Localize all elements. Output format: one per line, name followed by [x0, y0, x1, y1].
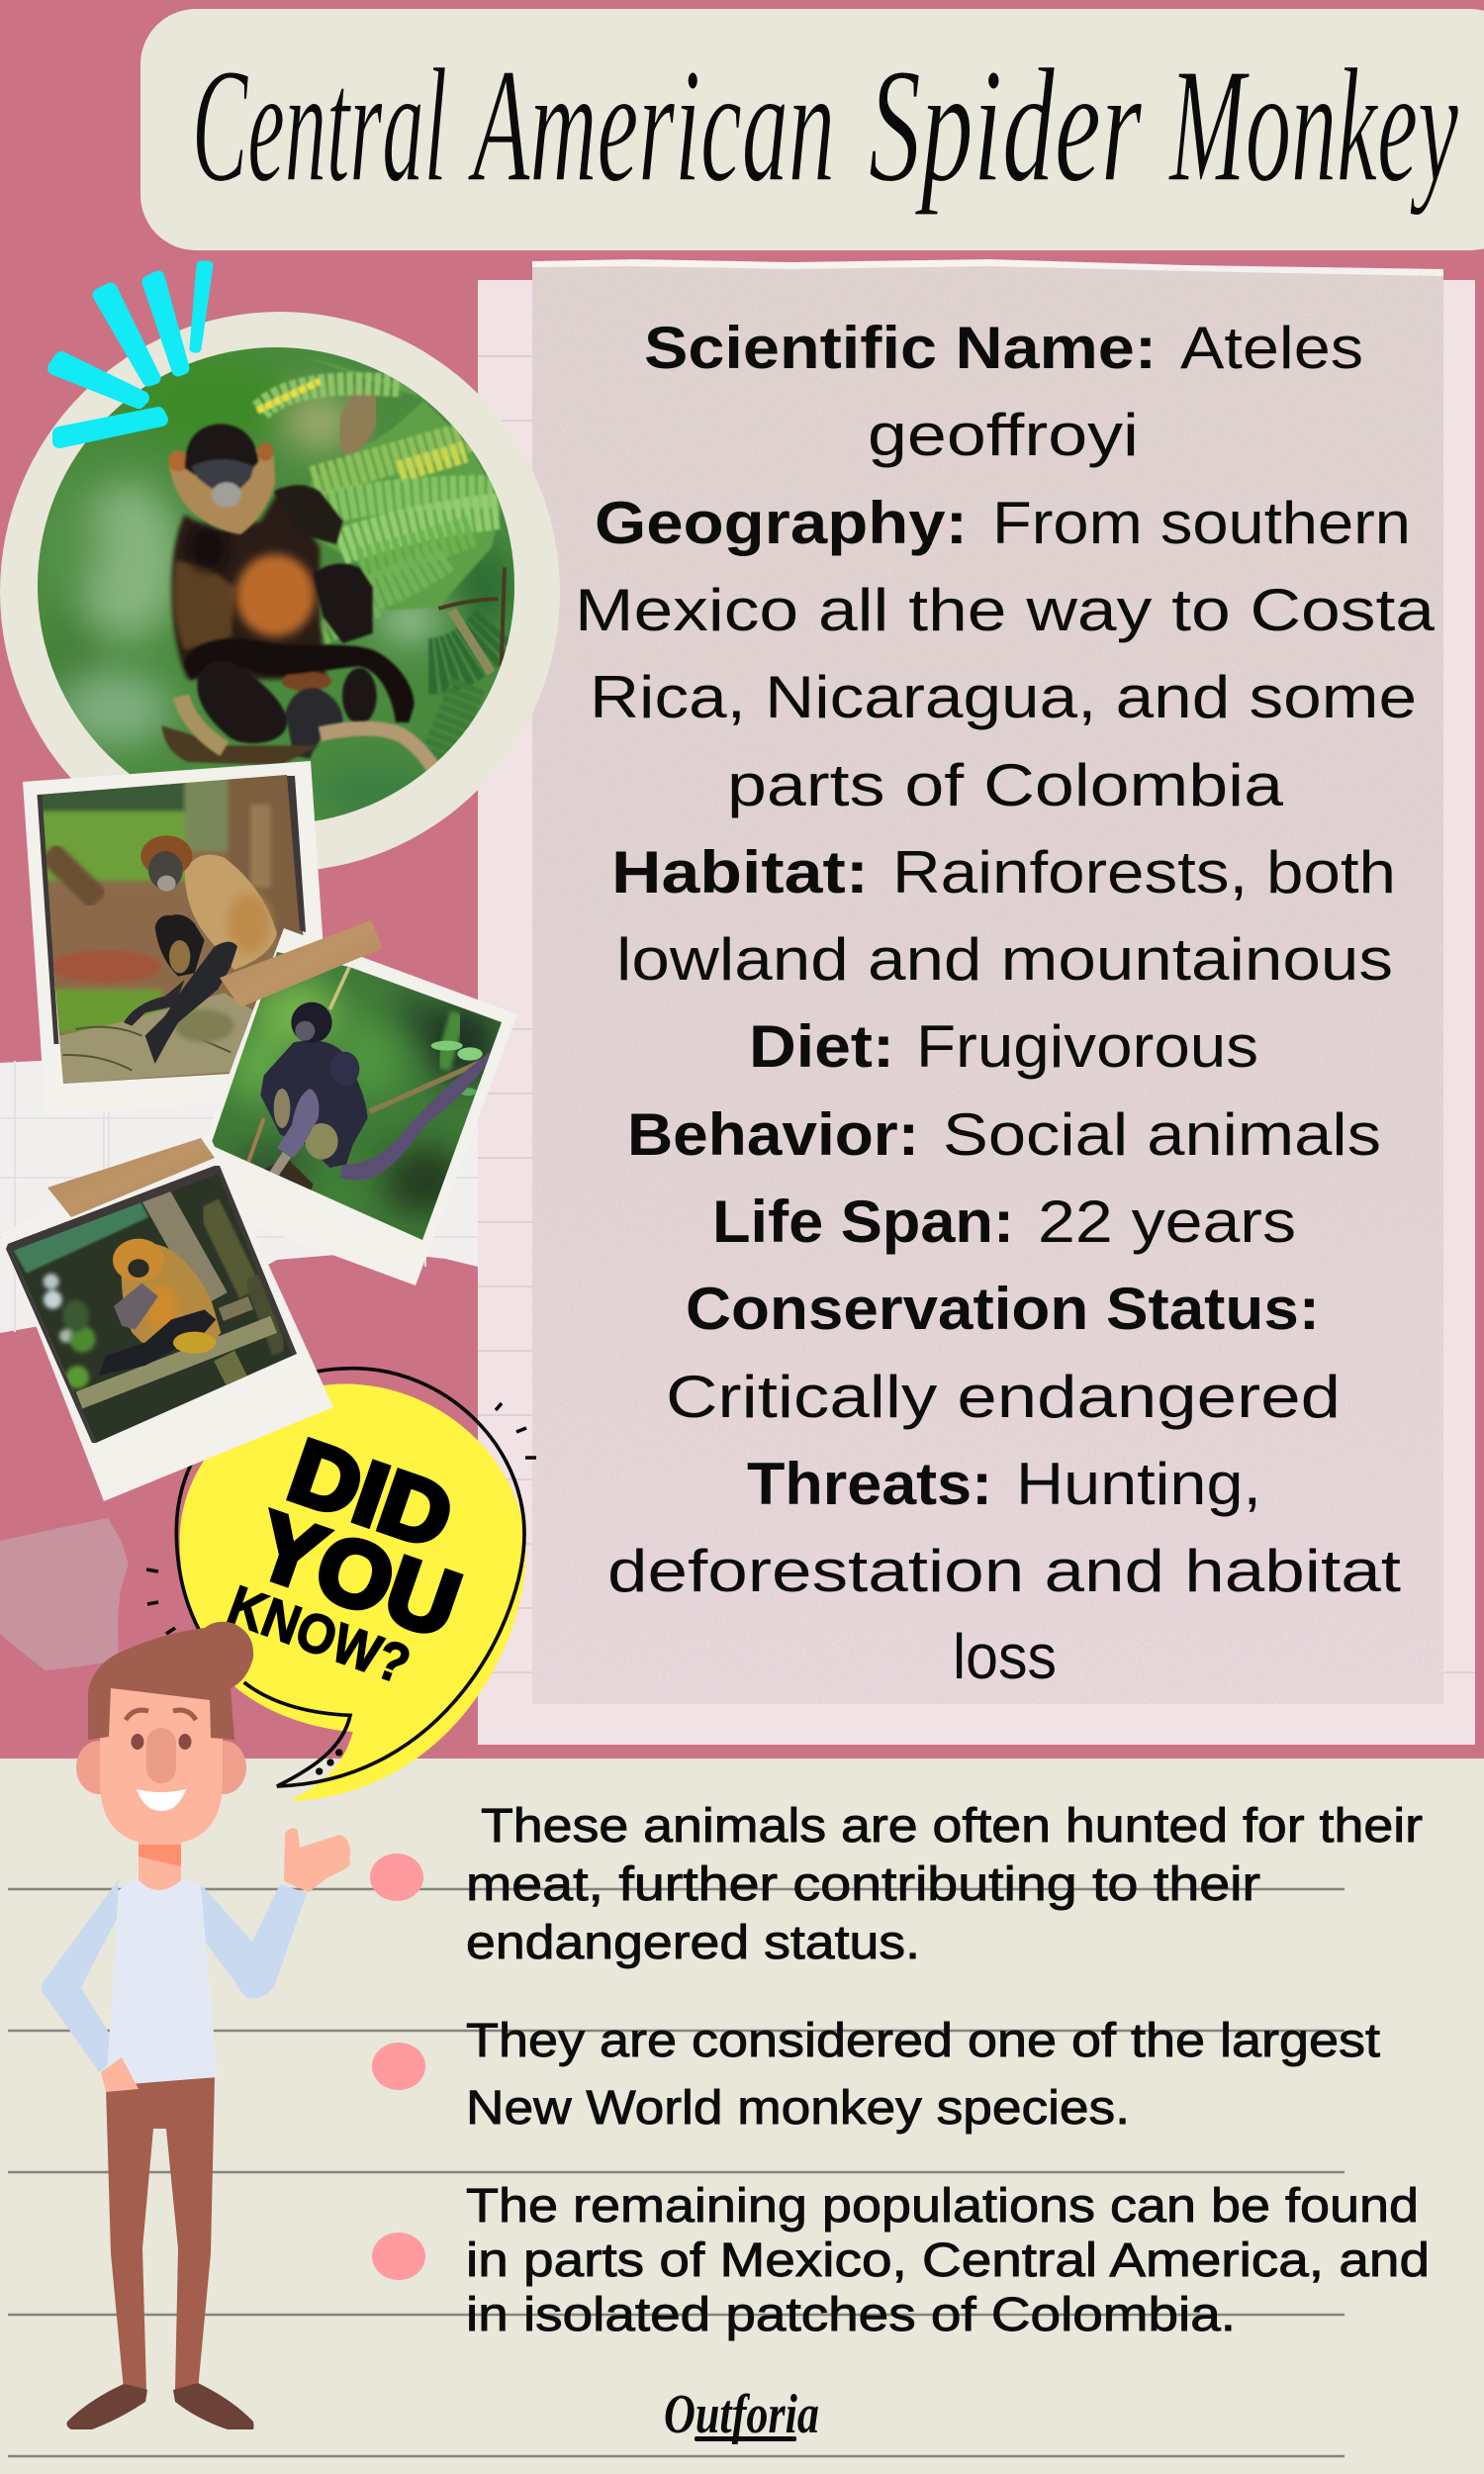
- text block: species facts: [575, 315, 1436, 1692]
- text block: species facts: 22 years: [1038, 1189, 1296, 1255]
- bubble text: KNOW?: [221, 1573, 418, 1696]
- polaroid 1: [20, 761, 336, 1118]
- text block: species facts: deforestation and habitat: [607, 1538, 1401, 1604]
- cyan accent burst: [54, 265, 209, 441]
- title: Spider: [869, 35, 1142, 216]
- title: Central: [192, 35, 447, 216]
- text block: species facts: Mexico all the way to Costa: [575, 577, 1436, 643]
- text block: species facts: Hunting,: [1016, 1451, 1261, 1517]
- text block: species facts: Frugivorous: [916, 1013, 1258, 1080]
- text block: fact 3: in isolated patches of Colombia.: [466, 2289, 1236, 2341]
- title: American: [467, 35, 835, 216]
- tape 2: [47, 1138, 215, 1217]
- torso: [107, 1876, 218, 2083]
- text block: species facts: From southern: [992, 490, 1411, 556]
- text block: species facts: Life Span:: [712, 1189, 1014, 1255]
- monkey: [168, 424, 414, 759]
- bubble text: DID: [277, 1421, 464, 1569]
- text block: species facts: lowland and mountainous: [616, 926, 1393, 993]
- bubble text: [221, 1421, 472, 1696]
- speech bubble: did you know: [176, 1369, 526, 1801]
- text block: species facts: parts of Colombia: [727, 752, 1284, 818]
- text block: species facts: geoffroyi: [868, 402, 1139, 468]
- text block: species facts: Rainforests, both: [892, 839, 1396, 905]
- text block: fact 1: [466, 1800, 1423, 1969]
- bubble accent ticks: [146, 1403, 536, 1634]
- text block: species facts: Threats:: [747, 1451, 992, 1517]
- main monkey photo in cream ring: [0, 312, 560, 872]
- text block: species facts: Habitat:: [611, 839, 869, 905]
- text block: species facts: Conservation Status:: [686, 1276, 1320, 1342]
- text block: fact 1: meat, further contributing to their: [466, 1858, 1260, 1911]
- mauve paper scrap: [0, 1518, 129, 1670]
- neck: [139, 1836, 181, 1890]
- text block: species facts: loss: [953, 1621, 1057, 1692]
- polaroid 2: [212, 928, 517, 1285]
- face: [126, 1710, 196, 1720]
- title: [192, 35, 1458, 216]
- text block: fact 3: [466, 2180, 1430, 2341]
- text block: fact 3: in parts of Mexico, Central America, and: [466, 2235, 1430, 2287]
- ears: [76, 1741, 122, 1794]
- torn white paper strip: [0, 1060, 478, 1333]
- text block: fact 2: They are considered one of the largest: [466, 2015, 1380, 2067]
- text block: species facts: Scientific Name:: [644, 315, 1157, 381]
- raised hand: [284, 1828, 350, 1892]
- hair: [88, 1622, 253, 1740]
- legs: [106, 2077, 215, 2390]
- text block: species facts: Rica, Nicaragua, and some: [590, 664, 1417, 730]
- illustrated presenter: [42, 1622, 350, 2429]
- logo: Outforia: Outforia: [664, 2384, 819, 2445]
- text block: species facts: Behavior:: [627, 1101, 919, 1168]
- bubble text: YOU: [243, 1492, 472, 1658]
- title banner: [140, 9, 1484, 250]
- arms: [42, 1879, 122, 2072]
- panel: did you know background: [0, 1759, 1484, 2474]
- text block: species facts: Social animals: [943, 1101, 1381, 1168]
- tape 1: [220, 920, 383, 1007]
- text block: fact 2: New World monkey species.: [466, 2082, 1130, 2135]
- panel: facts paper: [478, 259, 1475, 1745]
- branch: [161, 696, 433, 769]
- text block: species facts: Ateles: [1180, 315, 1363, 381]
- fern fronds: [257, 356, 502, 759]
- pink bullets: [370, 1854, 425, 2280]
- polaroid 3: [0, 1138, 336, 1504]
- text block: species facts: Diet:: [749, 1013, 894, 1080]
- text block: fact 3: The remaining populations can be found: [466, 2180, 1419, 2233]
- text block: fact 1: endangered status.: [466, 1917, 920, 1969]
- text block: species facts: Geography:: [595, 490, 968, 556]
- head: [100, 1682, 223, 1845]
- text block: fact 2: [466, 2015, 1380, 2135]
- text block: species facts: Critically endangered: [666, 1364, 1341, 1430]
- pocket hand: [101, 2057, 139, 2092]
- text block: fact 1: These animals are often hunted for their: [481, 1800, 1423, 1853]
